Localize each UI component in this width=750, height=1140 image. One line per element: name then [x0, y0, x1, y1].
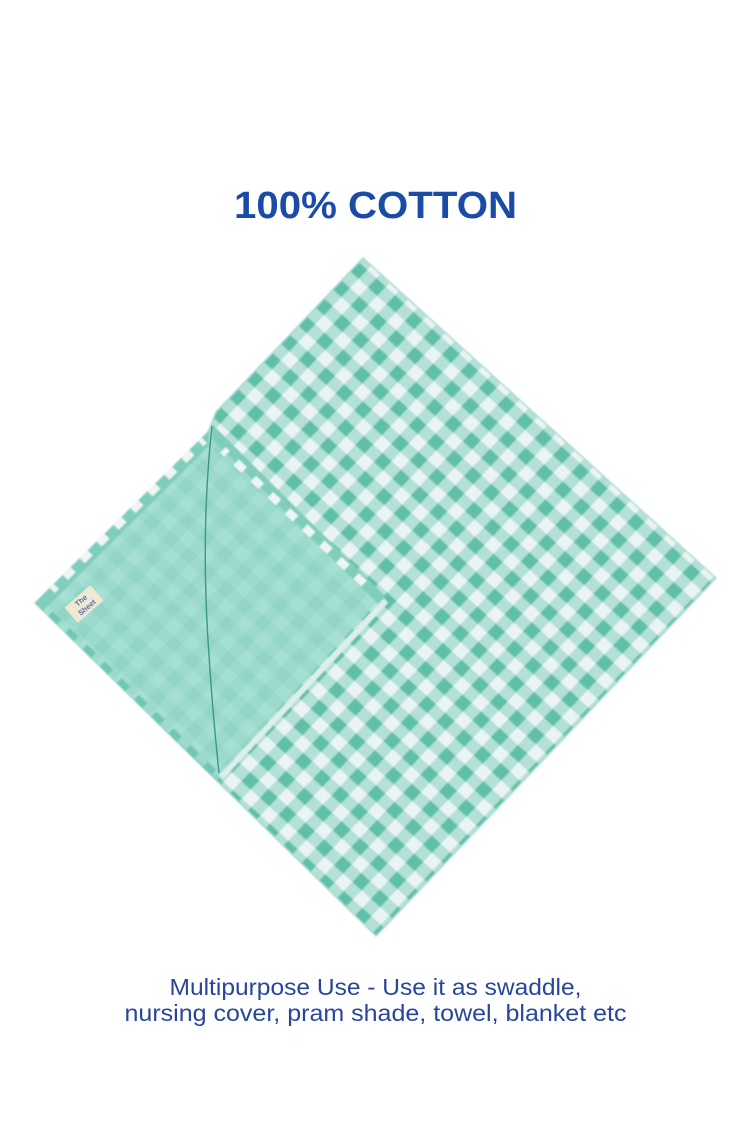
caption text: Multipurpose Use - Use it as swaddle,: [170, 974, 582, 1000]
sewn fabric label: Sheet: [76, 597, 98, 617]
hem on upper right edge of flap: [212, 424, 385, 604]
caption text: [124, 974, 626, 1026]
fabric surfaces: [35, 258, 716, 936]
hem on upper left edge of flap: [35, 432, 209, 611]
caption text: nursing cover, pram shade, towel, blanket etc: [124, 1000, 626, 1026]
tonal hem on lower left edge of flap: [50, 614, 216, 775]
hem checks on upper right edge: [223, 450, 373, 592]
main gingham fabric: [35, 258, 716, 936]
hem checks on upper left edge: [52, 440, 204, 590]
flap crease line: [205, 426, 219, 773]
folded flap: [35, 424, 382, 781]
white hem on lower right edge of flap: [219, 598, 388, 779]
folded gingham blanket: [35, 258, 716, 936]
sewn fabric label: [65, 585, 103, 623]
sewn fabric label: The: [73, 593, 89, 608]
title: 100% COTTON: [234, 185, 517, 227]
